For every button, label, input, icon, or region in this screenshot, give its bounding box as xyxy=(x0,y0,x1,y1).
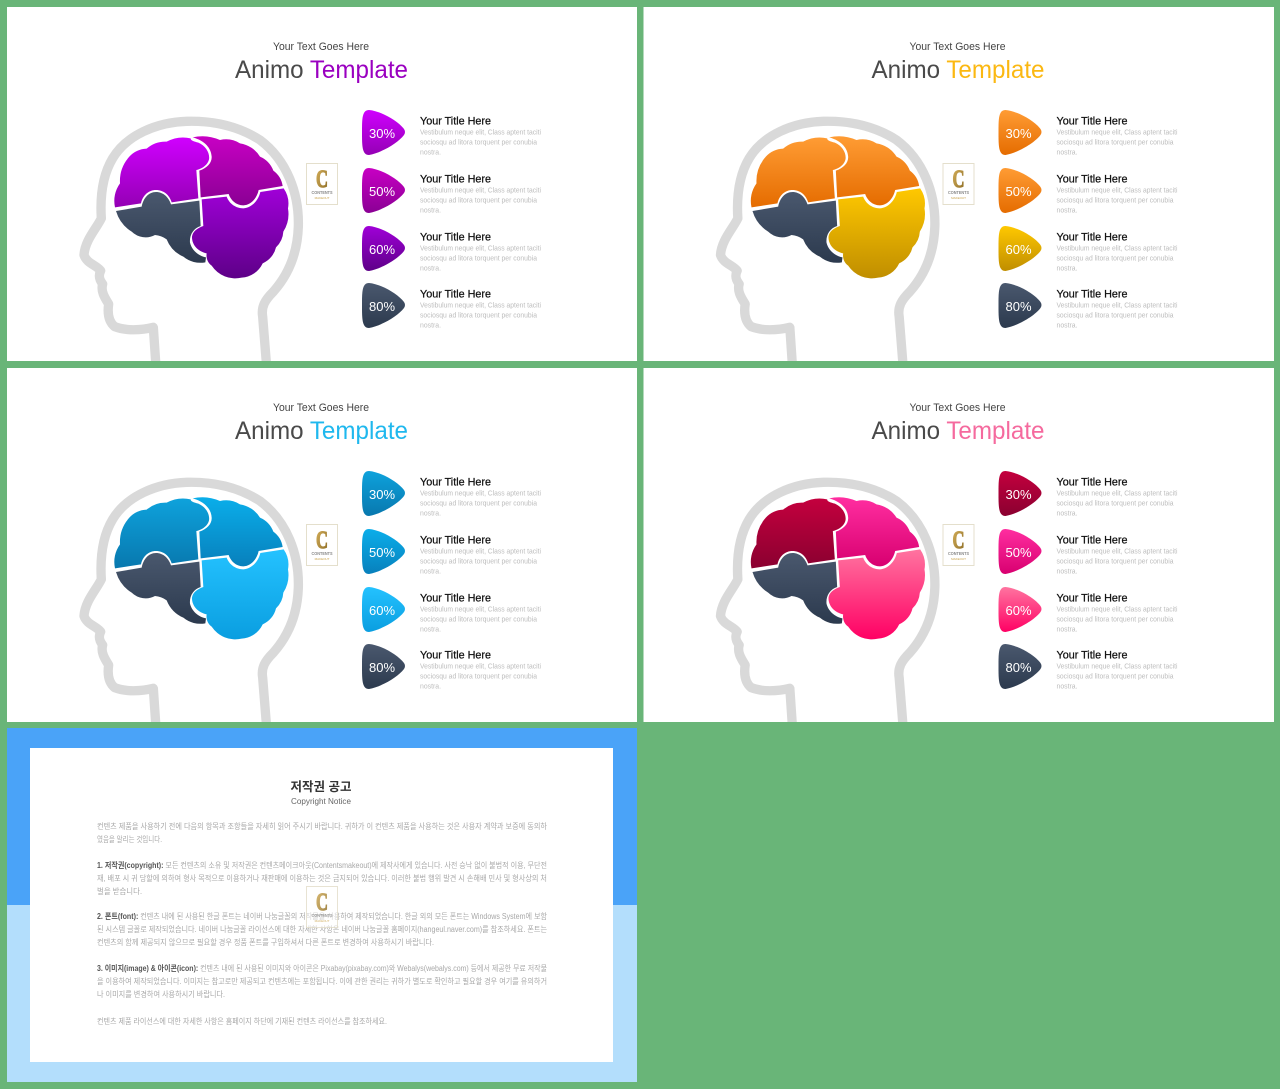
item 1: Vestibulum neque elit, Class aptent taciti xyxy=(1056,130,1178,136)
item 4: sociosqu ad litora torquent per conubia xyxy=(420,674,537,680)
item 3: Vestibulum neque elit, Class aptent taciti xyxy=(420,606,541,614)
item 4: Your Title Here xyxy=(420,650,491,662)
item 1: nostra. xyxy=(420,510,441,518)
item 4: Vestibulum neque elit, Class aptent taciti xyxy=(420,664,541,670)
item 2: sociosqu ad litora torquent per conubia xyxy=(420,198,537,204)
item 3: nostra. xyxy=(420,266,441,272)
watermark logo: MAKEOUT xyxy=(315,557,330,561)
item 3 xyxy=(998,587,1178,634)
item 1: 30% xyxy=(369,126,395,141)
item 4: Your Title Here xyxy=(1056,650,1128,662)
item 4: nostra. xyxy=(420,322,441,330)
item 4: 80% xyxy=(369,299,395,314)
item 1: Your Title Here xyxy=(1056,476,1128,488)
item 4: 80% xyxy=(369,660,395,675)
section 2 font: 2. 폰트(font): 컨텐츠 내에 된 사용된 한글 폰트는 네이버 나눔글꼴의 저작물을 사용하여 제작되었습니다. 한글 외의 모든 폰트는 Windows System에 보함 xyxy=(97,911,548,921)
item 1: Vestibulum neque elit, Class aptent taciti xyxy=(420,130,541,136)
item 1 xyxy=(998,110,1178,156)
watermark logo: MAKEOUT xyxy=(315,919,330,923)
watermark logo: C xyxy=(316,166,328,193)
watermark logo xyxy=(306,164,338,204)
section 3 image and icon: 3. 이미지(image) & 아이콘(icon): 컨텐츠 내에 된 사용된 이미지와 아이콘은 Pixabay(pixabay.com)와 Webalys(webalys.com) 등에서 제공한 무료 저작물 xyxy=(97,963,547,973)
item 1: Vestibulum neque elit, Class aptent taciti xyxy=(1056,490,1178,498)
watermark logo: CONTENTS xyxy=(948,551,969,556)
watermark logo: C xyxy=(316,889,328,916)
item 3: Your Title Here xyxy=(1056,592,1128,604)
item 2: Your Title Here xyxy=(1056,174,1128,186)
item 2: nostra. xyxy=(420,208,441,214)
item 4 xyxy=(998,644,1178,690)
item 1: nostra. xyxy=(1056,150,1078,156)
panel: pink slide xyxy=(644,368,1274,728)
item 3: nostra. xyxy=(1056,266,1078,272)
panel: orange slide xyxy=(644,7,1274,367)
item 3: Vestibulum neque elit, Class aptent taciti xyxy=(1056,606,1178,614)
copyright subheading: Copyright Notice xyxy=(291,796,351,806)
item 4 xyxy=(998,283,1178,330)
subtitle: Your Text Goes Here xyxy=(910,41,1006,53)
watermark logo: C xyxy=(952,166,964,193)
item 2: Vestibulum neque elit, Class aptent taciti xyxy=(420,548,541,556)
panel: blue slide xyxy=(7,368,637,728)
copyright heading: 저작권 공고 xyxy=(291,779,351,794)
item 3: Vestibulum neque elit, Class aptent taciti xyxy=(1056,246,1178,252)
item 2: Vestibulum neque elit, Class aptent taciti xyxy=(1056,188,1178,194)
item 1 xyxy=(998,471,1178,518)
intro paragraph xyxy=(97,821,548,844)
watermark logo xyxy=(943,524,974,566)
item 3: Your Title Here xyxy=(420,232,491,244)
item 3 xyxy=(362,226,541,272)
item 3 xyxy=(362,587,541,634)
intro paragraph: 였음을 알리는 것입니다. xyxy=(97,834,162,844)
section 1 copyright: 벌을 받습니다. xyxy=(97,886,142,896)
item 2: Your Title Here xyxy=(420,174,491,186)
subtitle: Your Text Goes Here xyxy=(273,41,369,53)
item 3: nostra. xyxy=(420,626,441,634)
subtitle: Your Text Goes Here xyxy=(910,402,1006,414)
watermark logo: C xyxy=(316,527,328,554)
item 3: 60% xyxy=(369,603,395,618)
watermark logo xyxy=(943,164,974,204)
item 4: 80% xyxy=(1005,660,1032,675)
section 3 image and icon: 을 이용하여 제작되었습니다. 이미지는 참고로만 제공되고 컨텐츠에는 포함됩니다. 이에 관한 권리는 귀하가 별도로 확인하고 필요할 경우 여기를 유의하거 xyxy=(97,976,547,986)
section 2 font: 된 시스템 글꼴로 제작되었습니다. 네이버 나눔글꼴 라이선스에 대한 자세한 사항은 네이버 나눔글꼴 홈페이지(hangeul.naver.com)를 참조하세요. 폰트는 xyxy=(97,924,547,934)
item 2: Your Title Here xyxy=(1056,534,1128,546)
title: Animo Template xyxy=(235,417,408,445)
section 1 copyright: 1. 저작권(copyright): 모든 컨텐츠의 소유 및 저작권은 컨텐츠메이크아웃(Contentsmakeout)에 제작사에게 있습니다. 사전 승낙 없이 불법적 이용, 무단전 xyxy=(97,860,547,870)
item 4 xyxy=(362,644,541,690)
item 1 xyxy=(362,110,541,156)
watermark logo: CONTENTS xyxy=(312,913,332,918)
section 1 copyright: 재, 배포 시 귀 당할에 의하여 형사 목적으로 이용하거나 재판매에 이용하는 것은 금지되어 있습니다. 이러한 불법 행위 발견 시 손해배 민사 및 형사상의 처 xyxy=(97,873,547,883)
item 3: 60% xyxy=(1005,603,1032,618)
item 4: sociosqu ad litora torquent per conubia xyxy=(1056,312,1174,320)
head and brain diagram xyxy=(720,482,935,728)
item 3 xyxy=(998,226,1178,272)
watermark logo: CONTENTS xyxy=(312,190,332,195)
title: Animo Template xyxy=(235,56,408,84)
item 2 xyxy=(362,168,541,214)
item 1: Your Title Here xyxy=(1056,116,1128,128)
item 1: sociosqu ad litora torquent per conubia xyxy=(420,500,537,508)
subtitle: Your Text Goes Here xyxy=(273,402,369,414)
item 1: 30% xyxy=(1005,487,1032,502)
item 1 xyxy=(362,471,541,518)
section 2 font xyxy=(97,911,548,947)
item 2 xyxy=(998,529,1178,576)
item 4: nostra. xyxy=(1056,322,1078,330)
item 1: Vestibulum neque elit, Class aptent taciti xyxy=(420,490,541,498)
section 1 copyright xyxy=(97,860,547,896)
item 2: sociosqu ad litora torquent per conubia xyxy=(1056,558,1174,566)
head and brain diagram xyxy=(84,121,298,367)
item 1: Your Title Here xyxy=(420,476,491,488)
item 3: sociosqu ad litora torquent per conubia xyxy=(420,256,537,262)
item 3: sociosqu ad litora torquent per conubia xyxy=(1056,256,1174,262)
item 1: sociosqu ad litora torquent per conubia xyxy=(420,140,537,146)
item 4: sociosqu ad litora torquent per conubia xyxy=(420,312,537,320)
section 2 font: 컨텐츠의 함께 제공되지 않으므로 필요할 경우 정품 폰트를 구입하셔서 다른 폰트로 변경하여 사용하시기 바랍니다. xyxy=(97,937,434,947)
item 4: Vestibulum neque elit, Class aptent taciti xyxy=(1056,664,1178,670)
item 2: 50% xyxy=(369,184,395,199)
item 2: nostra. xyxy=(420,568,441,576)
item 3: Your Title Here xyxy=(1056,232,1128,244)
item 4: Vestibulum neque elit, Class aptent taciti xyxy=(420,302,541,310)
item 2: nostra. xyxy=(1056,208,1078,214)
title: Animo Template xyxy=(872,56,1044,84)
item 1: sociosqu ad litora torquent per conubia xyxy=(1056,140,1174,146)
item 4: Your Title Here xyxy=(1056,288,1128,300)
watermark logo xyxy=(306,886,338,928)
item 4: sociosqu ad litora torquent per conubia xyxy=(1056,674,1174,680)
item 3: sociosqu ad litora torquent per conubia xyxy=(420,616,537,624)
item 3: Vestibulum neque elit, Class aptent taciti xyxy=(420,246,541,252)
item 2: Vestibulum neque elit, Class aptent taciti xyxy=(1056,548,1178,556)
closing line: 컨텐츠 제품 라이선스에 대한 자세한 사항은 홈페이지 하단에 기재된 컨텐츠 라이선스를 참조하세요. xyxy=(97,1016,387,1026)
item 1: sociosqu ad litora torquent per conubia xyxy=(1056,500,1174,508)
watermark logo: C xyxy=(952,527,964,554)
item 2: nostra. xyxy=(1056,568,1078,576)
item 3: nostra. xyxy=(1056,626,1078,634)
item 1: 30% xyxy=(369,487,395,502)
item 1: nostra. xyxy=(1056,510,1078,518)
item 1: nostra. xyxy=(420,150,441,156)
watermark logo: MAKEOUT xyxy=(951,557,966,561)
item 3: sociosqu ad litora torquent per conubia xyxy=(1056,616,1174,624)
item 2: 50% xyxy=(1005,184,1032,199)
panel: copyright notice xyxy=(7,728,637,1082)
item 2 xyxy=(998,168,1178,214)
panel: purple slide xyxy=(7,7,637,367)
item 2: Your Title Here xyxy=(420,534,491,546)
item 2: 50% xyxy=(1005,545,1032,560)
item 3: Your Title Here xyxy=(420,592,491,604)
item 1: 30% xyxy=(1005,126,1032,141)
watermark logo: MAKEOUT xyxy=(951,196,966,200)
item 4: Your Title Here xyxy=(420,288,491,300)
item 1: Your Title Here xyxy=(420,116,491,128)
item 4: nostra. xyxy=(1056,684,1078,690)
item 2: 50% xyxy=(369,545,395,560)
item 2 xyxy=(362,529,541,576)
watermark logo xyxy=(306,524,338,566)
item 3: 60% xyxy=(369,242,395,257)
item 2: Vestibulum neque elit, Class aptent taciti xyxy=(420,188,541,194)
head and brain diagram xyxy=(720,121,935,367)
item 2: sociosqu ad litora torquent per conubia xyxy=(420,558,537,566)
item 3: 60% xyxy=(1005,242,1032,257)
item 4: Vestibulum neque elit, Class aptent taciti xyxy=(1056,302,1178,310)
head and brain diagram xyxy=(84,482,298,728)
watermark logo: MAKEOUT xyxy=(315,196,330,200)
section 3 image and icon xyxy=(97,963,547,999)
item 4: 80% xyxy=(1005,299,1032,314)
watermark logo: CONTENTS xyxy=(312,551,332,556)
section 3 image and icon: 나 이미지를 변경하여 사용하시기 바랍니다. xyxy=(97,989,225,999)
item 2: sociosqu ad litora torquent per conubia xyxy=(1056,198,1174,204)
intro paragraph: 컨텐츠 제품을 사용하기 전에 다음의 항목과 조항들을 자세히 읽어 주시기 바랍니다. 귀하가 이 컨텐츠 제품을 사용하는 것은 사용자 계약과 보증에 동의하 xyxy=(97,821,548,831)
watermark logo: CONTENTS xyxy=(948,190,969,195)
item 4: nostra. xyxy=(420,684,441,690)
item 4 xyxy=(362,283,541,330)
title: Animo Template xyxy=(872,417,1044,445)
